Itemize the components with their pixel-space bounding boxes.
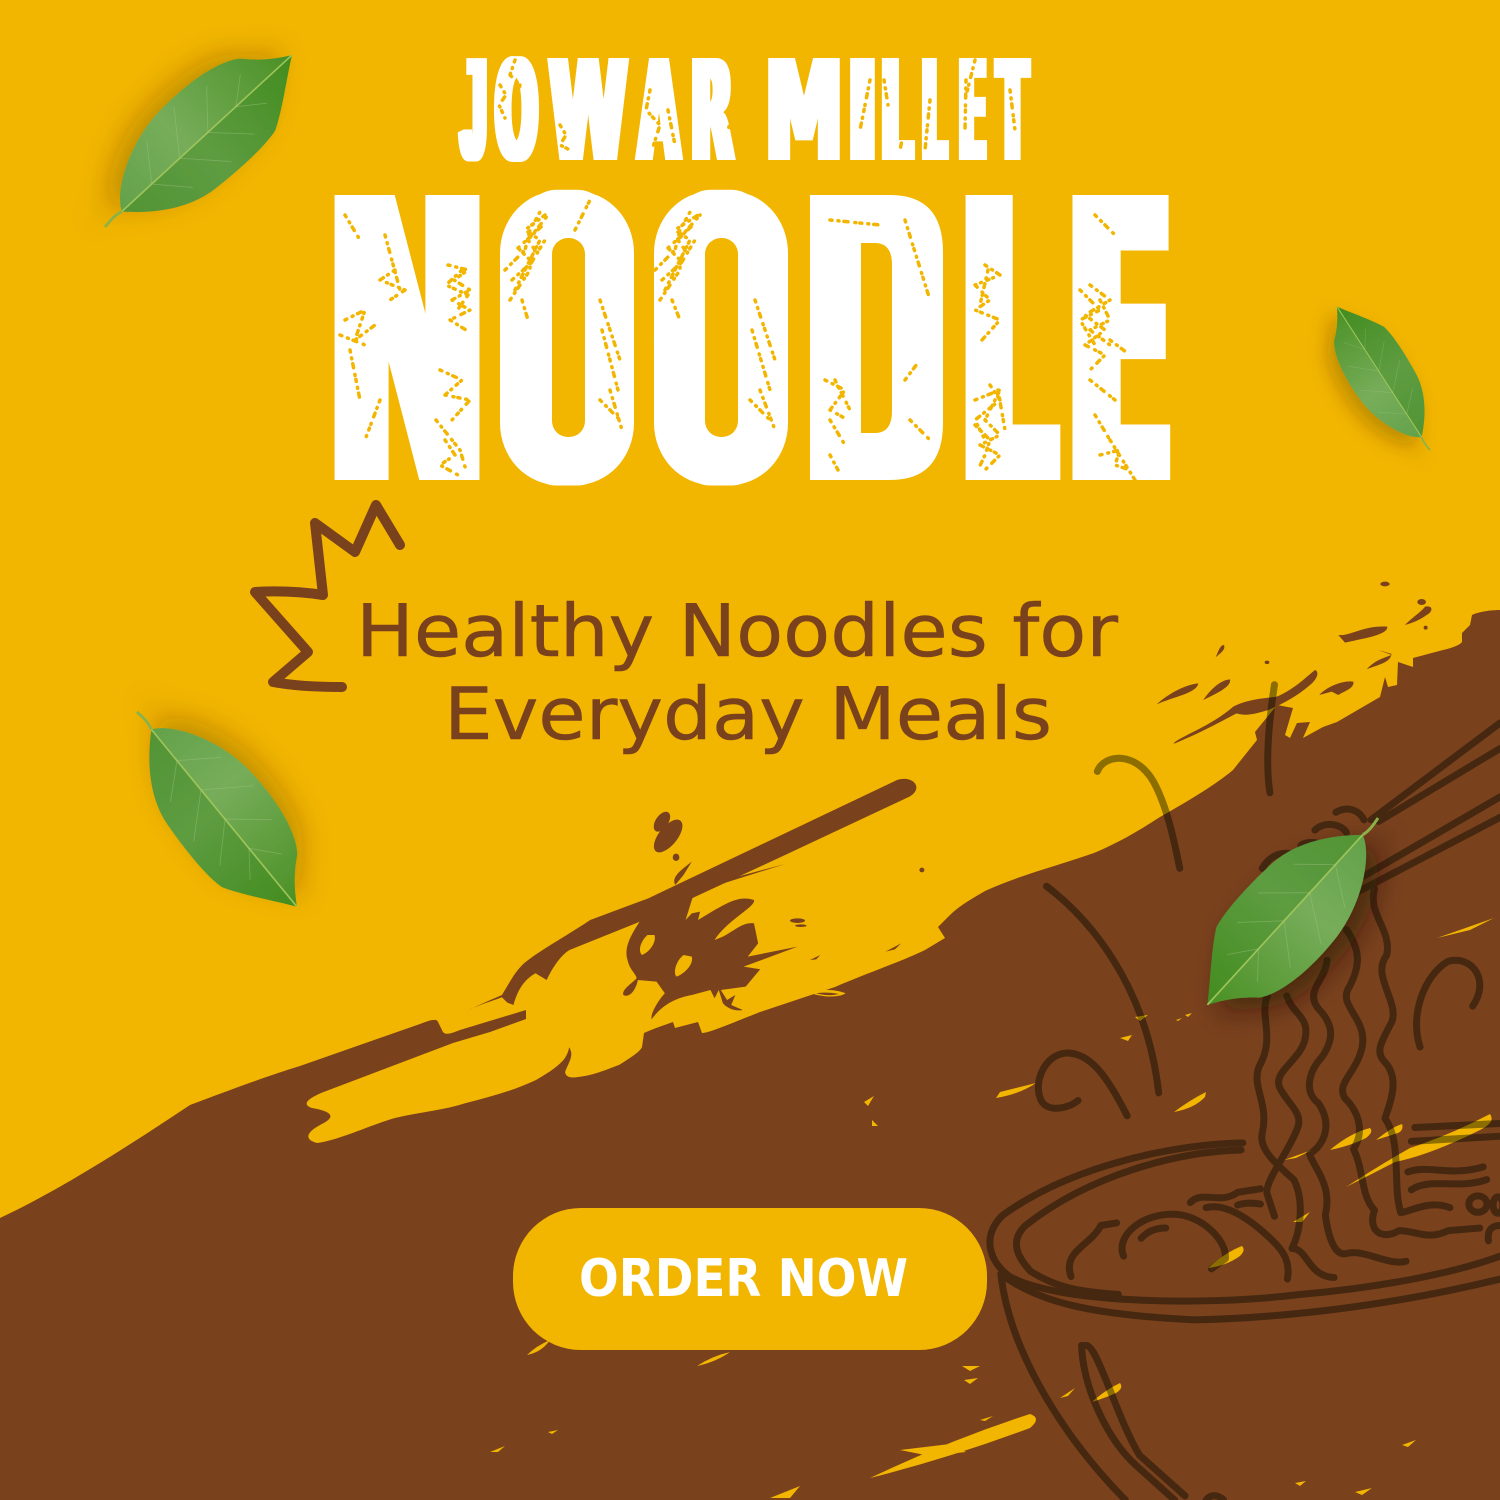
title: Jowar Millet: I <box>846 31 879 194</box>
yellow paint splatters <box>490 918 1494 1498</box>
subtitle <box>356 589 1118 756</box>
leaf: middle left <box>99 680 336 938</box>
leaf: over the chopsticks <box>1171 785 1415 1039</box>
title: Jowar Millet: M <box>765 31 843 194</box>
chopsticks <box>1262 723 1500 891</box>
button: order now: ORDER NOW <box>579 1249 908 1309</box>
rounded letter bodies for O O D <box>500 191 943 485</box>
title: Jowar Millet: A <box>638 31 680 194</box>
title: Jowar Millet: J <box>461 27 486 192</box>
speckles on Jowar Millet <box>499 60 1015 150</box>
icon: spiky doodle accent <box>255 505 400 687</box>
title: Noodle: N <box>327 118 487 573</box>
button: order now <box>513 1208 987 1350</box>
title: Jowar Millet: E <box>959 31 986 194</box>
brush strokes and blob <box>468 779 924 1019</box>
splash strokes top right <box>1157 582 1431 743</box>
title: Noodle: O <box>502 118 631 573</box>
title: Jowar Millet: R <box>691 31 733 194</box>
subtitle: Everyday Meals <box>444 672 1052 756</box>
soup contents <box>1069 1123 1500 1279</box>
title: Noodle: L <box>962 118 1054 573</box>
wavy noodles <box>1257 889 1480 1278</box>
bowl <box>990 1143 1500 1500</box>
speckles on Noodle <box>340 200 1135 480</box>
text: T <box>998 31 1028 194</box>
brown diagonal brush background <box>0 582 1500 1500</box>
title: Jowar Millet: L <box>922 31 946 194</box>
title: Jowar Millet: L <box>881 31 912 194</box>
noodle splash arcs <box>1038 685 1480 1116</box>
leaf: top right <box>1310 290 1456 467</box>
title: Jowar Millet: W <box>549 31 628 194</box>
subtitle: Healthy Noodles for <box>356 589 1118 673</box>
title: Noodle: D <box>805 118 941 573</box>
title: Noodle: O <box>656 118 785 573</box>
title: Jowar Millet <box>461 27 1028 194</box>
letter counters <box>552 238 892 437</box>
text: E <box>1069 118 1171 573</box>
leaf: top left <box>72 19 325 262</box>
title: Noodle <box>327 118 1171 573</box>
noodle bowl line drawing <box>990 685 1500 1500</box>
title: Jowar Millet: O <box>496 31 538 194</box>
